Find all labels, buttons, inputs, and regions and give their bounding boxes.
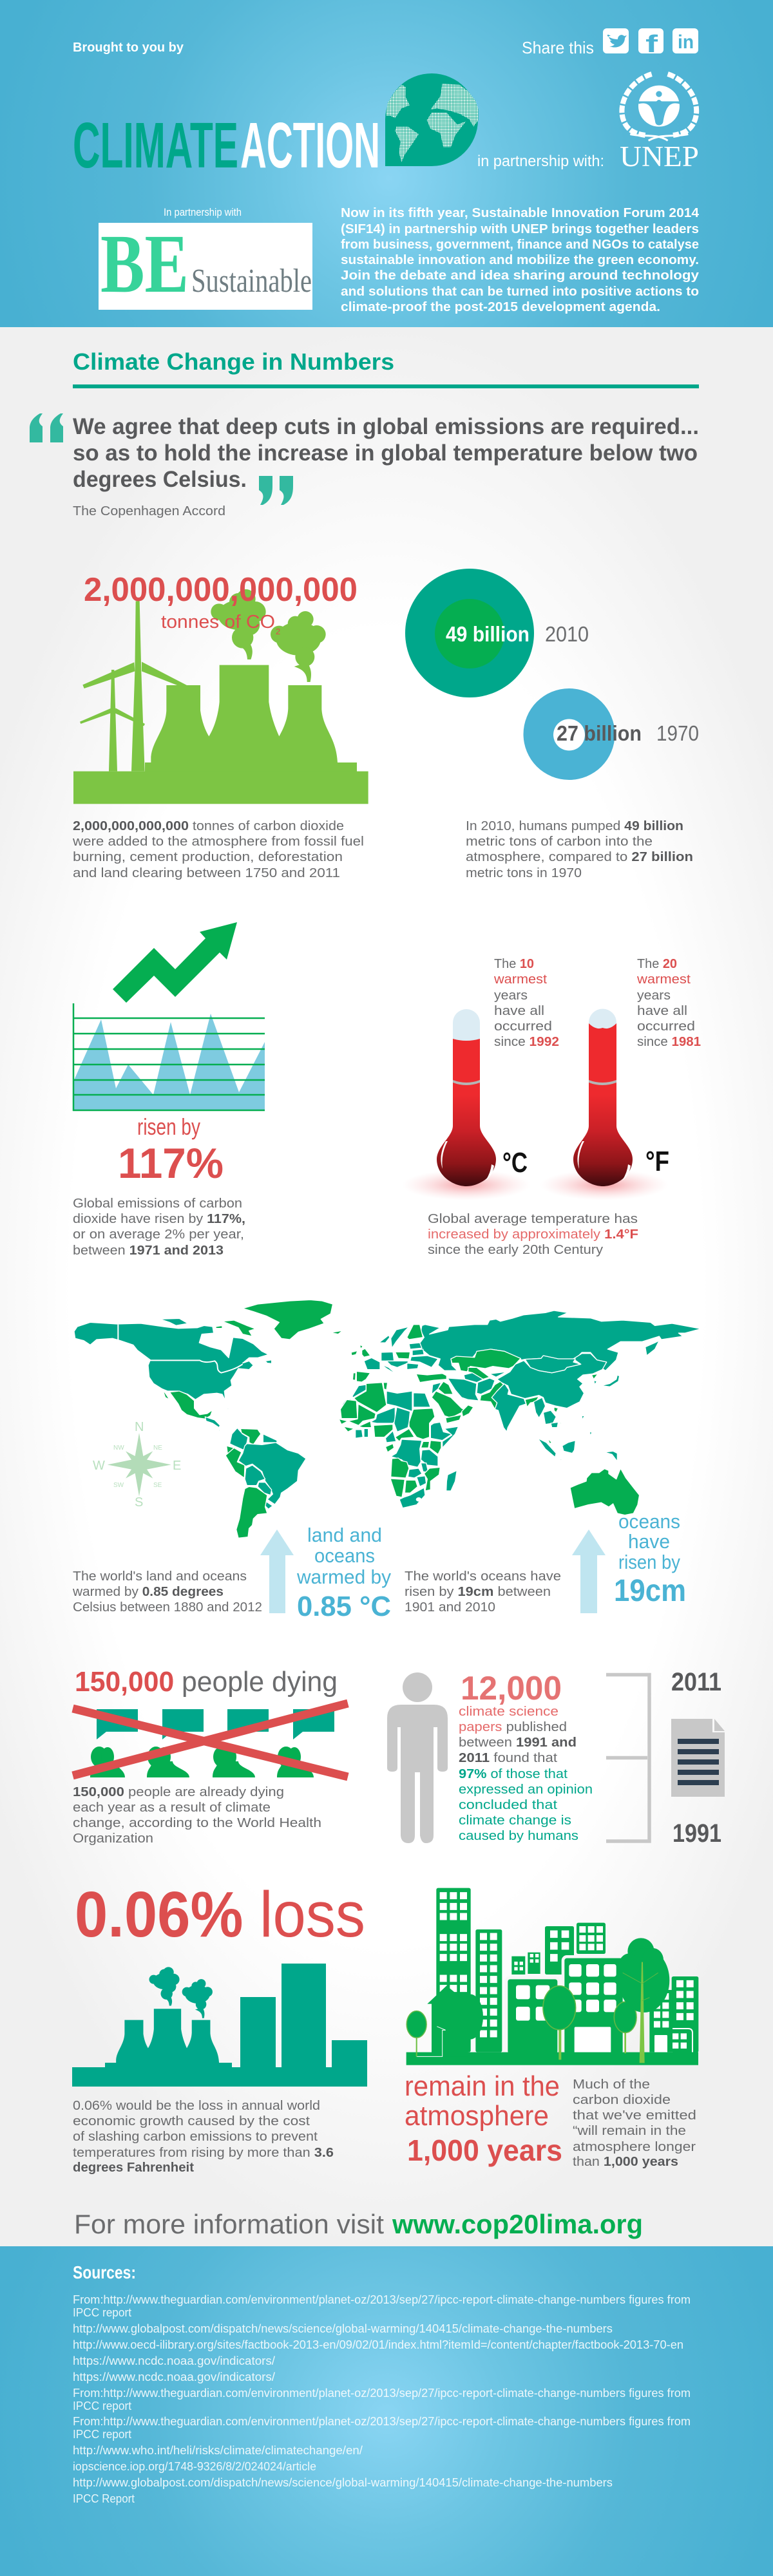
intro text: and solutions that can be turned into positive actions to	[341, 285, 699, 299]
caption: carbon remaining: Much of the	[573, 2078, 650, 2092]
sources list: IPCC report	[73, 2400, 131, 2412]
caption: climate science papers: climate science	[459, 1705, 558, 1719]
chart: 2010 emissions circle: 49 billion	[446, 622, 530, 646]
share this: Share this	[522, 38, 594, 57]
caption: climate science papers: caused by humans	[459, 1829, 578, 1843]
chart: 1970 emissions circle	[523, 688, 699, 780]
caption: 150,000 dying: each year as a result of climate	[73, 1801, 271, 1815]
heading: climate change in numbers: Climate Change in Numbers	[73, 348, 394, 375]
caption: oceans risen: The world's oceans have	[405, 1569, 561, 1584]
caption: climate science papers: papers published	[459, 1720, 567, 1734]
quote text: so as to hold the increase in global temperature below two	[73, 440, 698, 466]
sources list: http://www.globalpost.com/dispatch/news/science/global-warming/140415/climate-change-the-numbers	[73, 2322, 613, 2335]
stat: oceans risen by 19cm: 19cm	[614, 1574, 686, 1608]
illustration: green city	[406, 1888, 698, 2065]
arrow: land and oceans warming	[260, 1530, 294, 1613]
logo: UNEP	[620, 74, 699, 173]
intro text: climate-proof the post-2015 development agenda.	[341, 300, 660, 314]
caption: 20 warmest years: warmest	[636, 972, 691, 987]
caption: 49 billion vs 27 billion: metric tons in 1970	[466, 866, 582, 880]
caption: carbon remaining	[573, 2078, 696, 2169]
icon: compass rose: NW	[113, 1444, 124, 1452]
caption: 20 warmest years	[636, 957, 701, 1049]
sources list: From:http://www.theguardian.com/environment/planet-oz/2013/sep/27/ipcc-report-climate-change-numbers figures from	[73, 2415, 691, 2428]
stat: remain in the atmosphere: atmosphere	[405, 2100, 549, 2132]
caption: 150,000 dying: change, according to the World Health	[73, 1816, 321, 1830]
caption: global average temperature	[428, 1212, 638, 1257]
stat: 2,000,000,000,000: 2,000,000,000,000	[84, 571, 358, 609]
icon: linkedin	[673, 28, 698, 53]
caption: economic loss: degrees Fahrenheit	[73, 2161, 194, 2175]
logo: climate action: CLIMATE	[73, 109, 238, 182]
stat: oceans risen by 19cm	[614, 1510, 686, 1608]
caption: 49 billion vs 27 billion: In 2010, humans pumped 49 billion	[466, 819, 683, 833]
caption: economic loss: 0.06% would be the loss in annual world	[73, 2099, 320, 2113]
stat: land and oceans warmed by 0.85: 0.85 °C	[297, 1591, 391, 1622]
stat: oceans risen by 19cm: have	[628, 1530, 670, 1553]
caption: economic loss: temperatures from rising by more than 3.6	[73, 2146, 334, 2160]
sources list: https://www.ncdc.noaa.gov/indicators/	[73, 2354, 275, 2367]
caption: climate science papers: 97% of those that	[459, 1767, 568, 1781]
sources list: From:http://www.theguardian.com/environment/planet-oz/2013/sep/27/ipcc-report-climate-change-numbers figures from	[73, 2293, 691, 2306]
stat: 12,000 papers: 12,000	[461, 1670, 562, 1707]
caption: 49 billion vs 27 billion: metric tons of carbon into the	[466, 835, 653, 849]
caption: carbon remaining: “will remain in the	[573, 2124, 686, 2138]
stat label: risen by: risen by	[137, 1113, 200, 1140]
icon: twitter	[603, 28, 629, 53]
caption: 150,000 dying	[73, 1785, 321, 1846]
caption: economic loss	[73, 2099, 334, 2175]
caption: 2 trillion tonnes	[72, 819, 364, 880]
caption: global average temperature: Global average temperature has	[428, 1212, 638, 1226]
caption: 10 warmest years: The 10	[494, 957, 534, 971]
red cross	[73, 1703, 348, 1777]
stat: land and oceans warmed by 0.85	[296, 1524, 391, 1622]
sources list: http://www.who.int/heli/risks/climate/climatechange/en/	[73, 2444, 363, 2457]
caption: 20 warmest years: The 20	[637, 957, 677, 971]
icon: fahrenheit thermometer	[540, 1009, 669, 1200]
call to action: www.cop20lima.org	[392, 2209, 643, 2239]
logo: BE Sustainable	[99, 218, 312, 310]
intro text: Now in its fifth year, Sustainable Innovation Forum 2014	[341, 206, 700, 220]
caption: carbon remaining: atmosphere longer	[573, 2140, 696, 2154]
arrow: rising trend	[113, 922, 237, 1003]
icon: compass rose	[93, 1420, 181, 1510]
stat: land and oceans warmed by 0.85: land and	[307, 1524, 382, 1546]
sources list: From:http://www.theguardian.com/environment/planet-oz/2013/sep/27/ipcc-report-climate-change-numbers figures from	[73, 2387, 691, 2400]
icon: compass rose: N	[135, 1420, 144, 1434]
logo: BE Sustainable: Sustainable	[191, 263, 312, 299]
stat: remain in the atmosphere: remain in the	[405, 2070, 560, 2102]
sources list	[73, 2293, 691, 2505]
caption: climate science papers: concluded that	[459, 1798, 558, 1812]
icon: compass rose: W	[93, 1459, 105, 1473]
logo: UNEP: UNEP	[620, 140, 699, 173]
icon: facebook: f	[645, 31, 658, 58]
icon: document	[671, 1719, 725, 1797]
icon: celsius thermometer: °C	[502, 1147, 528, 1179]
brought to you by: Brought to you by	[73, 41, 184, 55]
icon: facebook	[638, 28, 663, 58]
caption: 20 warmest years: occurred	[637, 1019, 695, 1034]
world map	[74, 1300, 701, 1538]
in partnership with: in partnership with:	[477, 153, 604, 170]
caption: climate science papers: expressed an opinion	[459, 1783, 593, 1797]
icon: opening quote mark	[30, 413, 63, 442]
caption: emissions rise	[73, 1197, 245, 1258]
chart: 2010 emissions circle	[405, 569, 589, 697]
chart: 1970 emissions circle: 1970	[656, 721, 699, 745]
stat: oceans risen by 19cm: oceans	[618, 1510, 680, 1533]
stat: oceans risen by 19cm: risen by	[618, 1551, 680, 1573]
sources list: IPCC report	[73, 2306, 131, 2319]
caption: climate science papers: 2011 found that	[459, 1751, 557, 1765]
caption: land and oceans warmed: warmed by 0.85 degrees	[72, 1585, 224, 1599]
stat: remain in the atmosphere: 1,000 years	[407, 2134, 562, 2167]
caption: oceans risen: 1901 and 2010	[405, 1600, 495, 1615]
icon: compass rose: NE	[153, 1444, 162, 1452]
caption: 10 warmest years: since 1992	[494, 1035, 559, 1049]
icon: compass rose: S	[135, 1495, 143, 1510]
in partnership label: In partnership with	[164, 206, 242, 218]
icon: compass rose: SE	[153, 1482, 162, 1489]
arrow: sea level rise	[572, 1530, 606, 1613]
sources heading: Sources:	[73, 2262, 136, 2282]
caption: 20 warmest years: have all	[637, 1004, 687, 1018]
stat: remain in the atmosphere	[405, 2070, 562, 2167]
sources list: http://www.globalpost.com/dispatch/news/science/global-warming/140415/climate-change-the-numbers	[73, 2476, 613, 2489]
caption: carbon remaining: carbon dioxide	[573, 2093, 671, 2107]
intro text: (SIF14) in partnership with UNEP brings together leaders	[341, 222, 699, 236]
caption: global average temperature: increased by approximately 1.4°F	[428, 1227, 638, 1242]
quote text: We agree that deep cuts in global emissions are required...	[73, 414, 699, 439]
caption: land and oceans warmed: Celsius between 1880 and 2012	[73, 1600, 262, 1615]
call to action	[74, 2209, 643, 2239]
caption: economic loss: of slashing carbon emissions to prevent	[73, 2130, 318, 2144]
caption: emissions rise: between 1971 and 2013	[73, 1244, 224, 1258]
intro text: sustainable innovation and mobilize the green economy.	[341, 253, 699, 267]
caption: 10 warmest years	[493, 957, 559, 1049]
caption: carbon remaining: than 1,000 years	[573, 2155, 678, 2169]
illustration: factory and falling bars	[72, 1964, 367, 2087]
icon: compass rose: SW	[113, 1482, 124, 1489]
caption: 2 trillion tonnes: and land clearing between 1750 and 2011	[73, 866, 340, 880]
logo: BE Sustainable: BE	[100, 218, 189, 310]
caption: emissions rise: dioxide have risen by 117%,	[73, 1212, 245, 1226]
quote text	[73, 414, 699, 492]
icon: linkedin: in	[678, 32, 694, 53]
caption: 10 warmest years: occurred	[494, 1019, 552, 1034]
icon: closing quote mark	[259, 476, 293, 505]
sources list: iopscience.iop.org/1748-9326/8/2/024024/article	[73, 2460, 316, 2473]
sources list: IPCC report	[73, 2428, 131, 2441]
chart: 2010 emissions circle: 2010	[545, 622, 589, 646]
caption: global average temperature: since the early 20th Century	[428, 1243, 603, 1257]
stat: land and oceans warmed by 0.85: oceans	[314, 1544, 375, 1567]
icon: celsius thermometer	[402, 1009, 531, 1200]
panel: header	[0, 0, 773, 327]
intro text	[341, 206, 700, 314]
caption: land and oceans warmed	[72, 1569, 262, 1615]
caption: oceans risen	[405, 1569, 561, 1615]
caption: 10 warmest years: warmest	[493, 972, 547, 987]
stat: 0.06% loss: 0.06% loss	[75, 1879, 365, 1951]
chart: 1970 emissions circle: 27 billion	[557, 721, 642, 745]
label: 1991: 1991	[673, 1819, 721, 1848]
heading: climate change in numbers	[73, 348, 699, 388]
sources list: IPCC Report	[73, 2492, 135, 2505]
intro text: from business, government, finance and NGOs to catalyse	[341, 238, 699, 252]
quote text: degrees Celsius.	[73, 467, 247, 492]
caption: land and oceans warmed: The world's land and oceans	[73, 1569, 247, 1584]
stat: 117%: 117%	[118, 1139, 224, 1187]
caption: 2 trillion tonnes: burning, cement production, deforestation	[73, 850, 343, 864]
caption: 2 trillion tonnes: were added to the atmosphere from fossil fuel	[72, 835, 364, 849]
caption: 20 warmest years: since 1981	[637, 1035, 701, 1049]
caption: 49 billion vs 27 billion	[466, 819, 693, 880]
caption: 20 warmest years: years	[637, 989, 671, 1003]
caption: 10 warmest years: years	[494, 989, 528, 1003]
sources list: http://www.oecd-ilibrary.org/sites/factbook-2013-en/09/02/01/index.html?itemId=/content/chapter/factbook-2013-70-en	[73, 2338, 683, 2351]
caption: economic loss: economic growth caused by the cost	[73, 2114, 310, 2128]
intro text: Join the debate and idea sharing around technology	[341, 269, 700, 283]
sources list: https://www.ncdc.noaa.gov/indicators/	[73, 2371, 275, 2383]
panel: sources footer	[0, 2246, 773, 2576]
caption: emissions rise: or on average 2% per year,	[73, 1227, 244, 1242]
caption: 2 trillion tonnes: 2,000,000,000,000 tonnes of carbon dioxide	[73, 819, 344, 833]
eurasia, africa and oceania	[330, 1311, 701, 1515]
quote source: The Copenhagen Accord	[73, 504, 225, 518]
illustration: people with speech bubbles	[73, 1703, 348, 1777]
heading: 150,000 people dying: 150,000 people dying	[75, 1666, 338, 1698]
caption: 150,000 dying: 150,000 people are already dying	[73, 1785, 284, 1799]
caption: 49 billion vs 27 billion: atmosphere, compared to 27 billion	[466, 850, 693, 864]
timeline bracket	[606, 1674, 649, 1841]
caption: 10 warmest years: have all	[494, 1004, 544, 1018]
stat: land and oceans warmed by 0.85: warmed by	[296, 1566, 391, 1588]
logo: climate action: ACTION	[240, 109, 380, 182]
label: 2011: 2011	[671, 1668, 721, 1696]
stat label: tonnes of CO2: tonnes of CO	[161, 612, 275, 632]
caption: climate science papers	[459, 1705, 593, 1843]
caption: 150,000 dying: Organization	[73, 1832, 153, 1846]
caption: climate science papers: between 1991 and	[459, 1736, 577, 1750]
caption: emissions rise: Global emissions of carbon	[73, 1197, 242, 1211]
americas	[74, 1300, 333, 1538]
caption: oceans risen: risen by 19cm between	[405, 1585, 551, 1599]
icon: person	[387, 1672, 448, 1843]
icon: globe	[385, 73, 479, 166]
icon: compass rose: E	[173, 1459, 181, 1473]
call to action: For more information visit	[74, 2209, 384, 2239]
caption: carbon remaining: that we've emitted	[573, 2108, 696, 2123]
icon: fahrenheit thermometer: °F	[645, 1146, 669, 1177]
stat label: tonnes of CO2: 2	[276, 627, 280, 636]
illustration: factory and wind turbines	[73, 589, 368, 804]
caption: climate science papers: climate change is	[459, 1814, 571, 1828]
chart: emissions area chart	[73, 1003, 265, 1111]
